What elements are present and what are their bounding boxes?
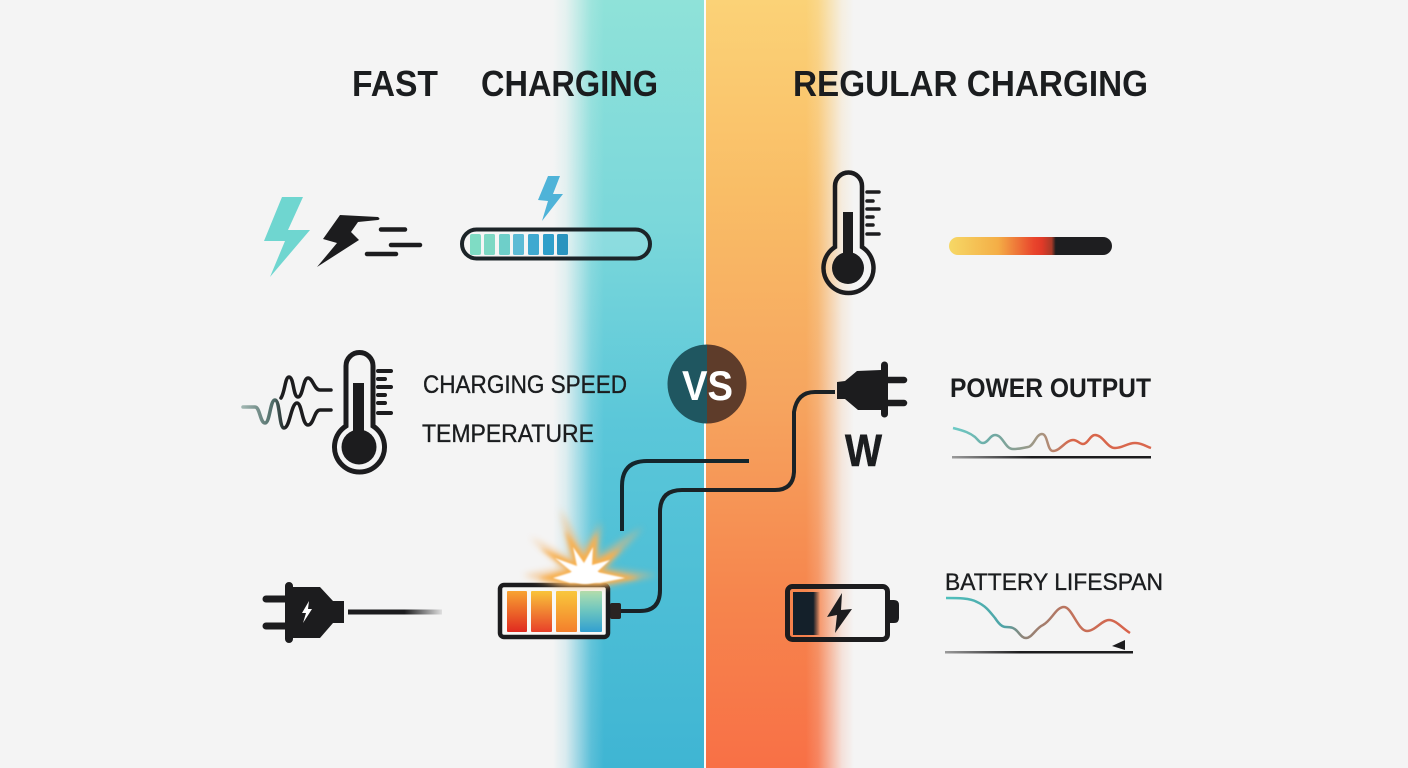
label: temperature: TEMPERATURE	[422, 420, 594, 448]
icon: low battery with bolt	[788, 586, 899, 640]
chart: power output	[952, 428, 1151, 458]
VS badge: VS	[682, 362, 733, 409]
label: battery lifespan: BATTERY LIFESPAN	[945, 569, 1163, 596]
icon: plug with bolt	[266, 582, 442, 643]
heading: fast charging	[352, 63, 658, 104]
temperature bar	[949, 237, 1112, 255]
icon: charging battery with colored cells	[500, 585, 621, 637]
panel: fast charging colour band	[553, 0, 704, 768]
label: charging speed: CHARGING SPEED	[423, 371, 627, 399]
panel: regular charging colour band	[706, 0, 854, 768]
heading: fast charging: CHARGING	[481, 63, 658, 104]
icon: thermometer, fast side	[334, 352, 391, 472]
icon: heat waves	[243, 377, 331, 428]
cable: upper loose cable	[622, 461, 749, 531]
icon: thermometer, regular side	[823, 172, 879, 293]
VS badge	[668, 344, 747, 424]
label: power output: POWER OUTPUT	[950, 373, 1151, 403]
label: watt symbol: W	[845, 425, 882, 476]
icon: small blue bolt	[538, 176, 563, 221]
chart: battery lifespan	[945, 598, 1133, 654]
icon: spark burst	[523, 508, 657, 588]
icon: teal lightning bolt	[264, 197, 310, 277]
heading: fast charging: FAST	[352, 63, 438, 104]
icon: black speeding bolt	[317, 215, 420, 267]
cable: battery to plug	[621, 392, 835, 611]
progress bar	[462, 230, 650, 258]
icon: plug	[837, 362, 904, 418]
heading: regular charging: REGULAR CHARGING	[793, 63, 1148, 104]
